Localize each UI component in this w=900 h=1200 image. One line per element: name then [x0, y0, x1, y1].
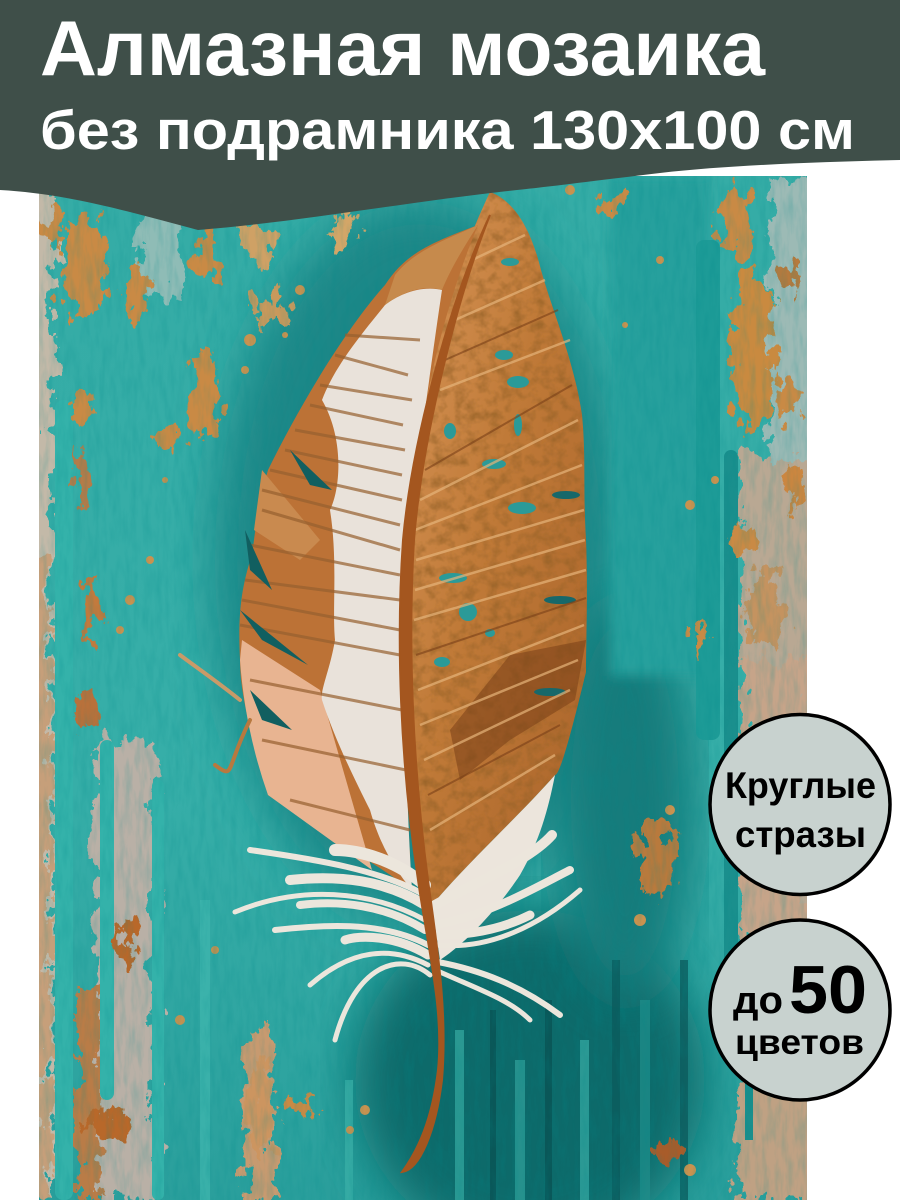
feather: copper tip above white: [385, 225, 478, 305]
feather: right copper vane: [407, 192, 587, 905]
badge: up to 50 colours: до: [733, 980, 783, 1022]
feather: white lower fringe: [180, 655, 580, 1040]
feather: left barb ridges: [240, 335, 420, 830]
header banner: [0, 0, 900, 230]
feather: teal flecks in copper: [434, 258, 580, 696]
feather: [180, 192, 587, 1172]
badge: up to 50 colours: цветов: [735, 1023, 864, 1062]
badge: round rhinestones: стразы: [735, 814, 866, 855]
painting: dark and light streaks at the bottom: [200, 900, 688, 1200]
painting: vertical teal drips: [55, 240, 753, 1200]
badge: round rhinestones: Круглые: [725, 765, 876, 806]
painting: teal background with copper feather: [25, 176, 825, 1200]
painting: paint grain texture: [39, 176, 807, 1200]
feather: light copper highlights: [414, 235, 586, 830]
badge: round rhinestones: [710, 714, 890, 894]
painting background: teal wash: [39, 176, 807, 1200]
painting: copper splatter specks: [116, 185, 719, 1176]
feather: dark copper shading: [450, 640, 586, 780]
painting edges: pale and tan streaks: [25, 176, 825, 1200]
title: [40, 4, 855, 161]
subtitle: без подрамника 130х100 см: [40, 99, 855, 161]
feather: left copper and peach vane: [239, 225, 478, 890]
badge: up to 50 colours: 50: [789, 952, 867, 1028]
feather: white paint on the left vane: [322, 289, 442, 890]
feather: dark copper ridges: [416, 310, 586, 795]
title: Алмазная мозаика: [40, 4, 766, 92]
painting: copper foil patches: [45, 191, 806, 1160]
feather: white paint on lower right vane: [432, 775, 555, 960]
feather: dark gaps between barbs: [240, 450, 332, 730]
feather: central quill: [400, 215, 490, 1172]
badge: up to 50 colours: [710, 920, 890, 1100]
